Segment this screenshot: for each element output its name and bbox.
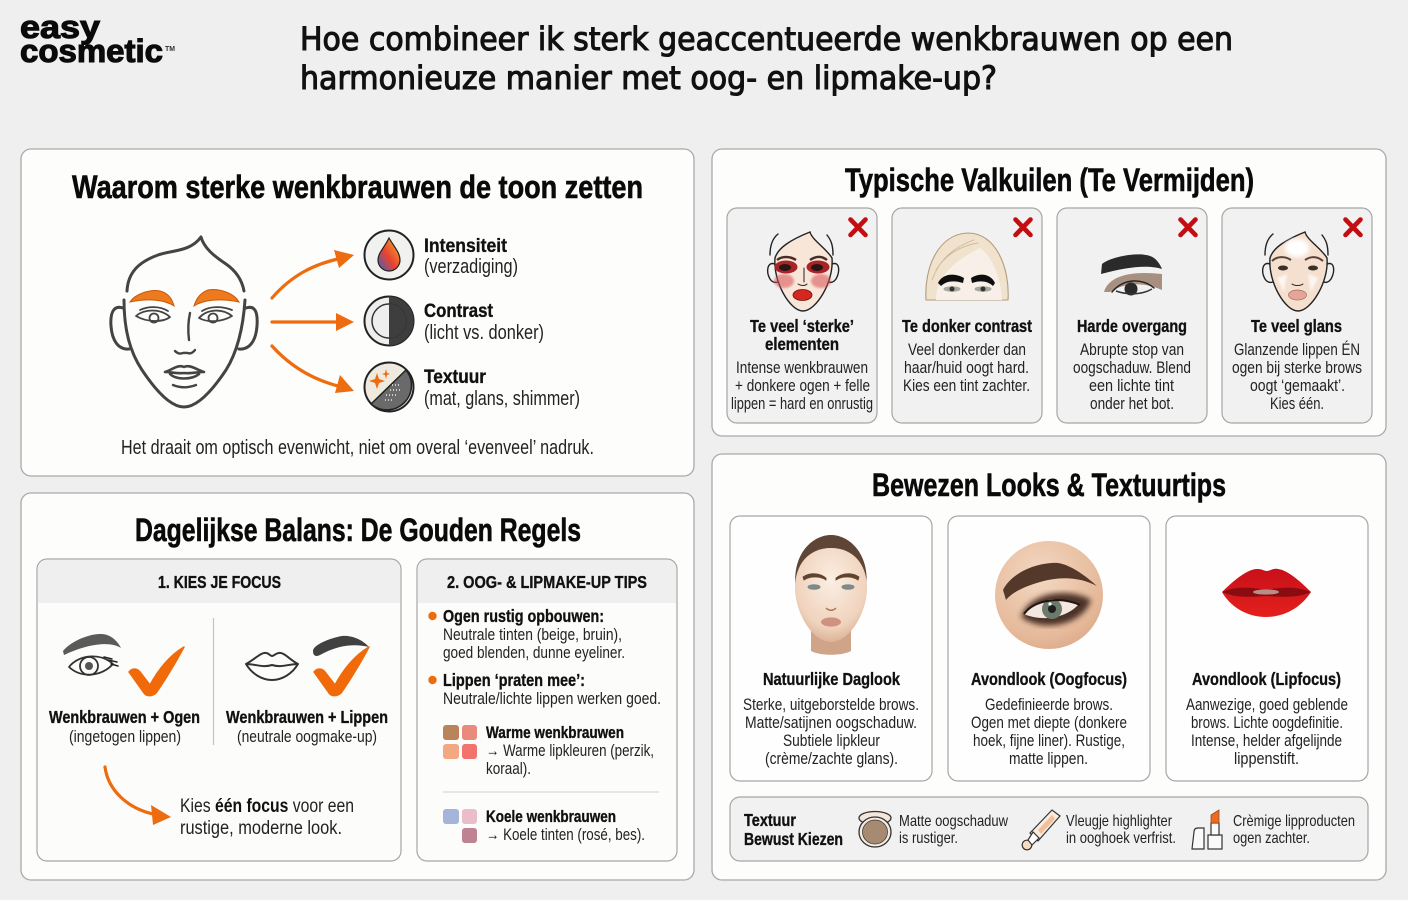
text: focus advice: Kies één focus voor een [180,796,354,817]
text: focus advice: rustige, moderne look. [180,818,342,839]
text: koele wenkbrauwen: Koele wenkbrauwen [486,808,616,826]
text: textuur: Textuur [424,366,486,388]
text: focus option 1 [49,707,200,746]
heading: textuur [744,810,843,849]
text: vleugje highlighter [1066,813,1176,847]
heading: bewezen looks: Bewezen Looks & Textuurtips [872,467,1226,503]
text: conclusion: Het draait om optisch evenwicht, niet om overal ‘evenveel’ nadruk. [121,437,594,459]
tip: ogen rustig opbouwen: Neutrale tinten (beige, bruin), [443,625,622,644]
text: natuurlijke daglook: Sterke, uitgeborstelde brows. [743,695,919,714]
text: card 1: elementen [765,334,839,354]
image: red lips [1222,569,1311,617]
panel: typische valkuilen [712,149,1386,436]
card: harde overgang [1057,208,1207,423]
icon: red x [1346,220,1360,235]
text: focus option 1: (ingetogen lippen) [69,727,181,746]
heading: valkuilen: Typische Valkuilen (Te Vermijden) [845,162,1254,198]
text: card 1: Te veel ‘sterke’ [750,316,854,336]
text: focus advice [180,796,354,839]
card: te donker contrast [892,208,1042,423]
icon: eye and brow [63,634,121,675]
panel: bewezen looks [712,454,1386,880]
icon: lipstick [1192,810,1222,849]
text: card 4: Kies één. [1270,394,1324,413]
text: koele wenkbrauwen [486,808,645,844]
text: card 3: onder het bot. [1090,394,1174,413]
logo: cosmetic [20,33,163,69]
text: card 2 [902,316,1032,395]
text: card 4: ogen bij sterke brows [1232,358,1362,377]
tip: ogen rustig opbouwen: Ogen rustig opbouwen: [443,606,604,626]
text: card 3: een lichte tint [1089,376,1174,395]
text: warme wenkbrauwen [486,724,654,778]
text: contrast: Contrast [424,300,493,322]
text: card 3: Harde overgang [1077,316,1187,336]
title: Hoe combineer ik sterk geaccentueerde wenkbrauwen op een [300,20,1233,58]
tip: ogen rustig opbouwen: goed blenden, dunne eyeliner. [443,643,625,662]
arrow: to focus advice [105,767,171,825]
sub-panel: oog- en lipmake-up tips [417,559,677,861]
text: card 1: lippen = hard en onrustig [731,394,873,413]
title [300,20,1233,97]
text: cremige lipproducten: Crèmige lipproducten [1233,813,1355,830]
header: kies je focus: 1. KIES JE FOCUS [158,572,281,592]
tip: lippen praten mee: Neutrale/lichte lippen werken goed. [443,689,661,708]
swatches: warm [443,725,477,759]
text: matte oogschaduw [899,813,1008,847]
text: textuur: (mat, glans, shimmer) [424,388,580,410]
icon: red x [1180,220,1196,235]
text: avondlook oogfocus: Avondlook (Oogfocus) [971,669,1127,689]
card: natuurlijke daglook [730,516,932,781]
text: card 4: oogt ‘gemaakt’. [1250,376,1345,395]
arrow: to contrast [272,313,354,331]
logo: TM [165,46,175,53]
text: focus option 2: Wenkbrauwen + Lippen [226,707,388,727]
card: te veel sterke elementen [727,208,877,423]
text: vleugje highlighter: in ooghoek verfrist. [1066,830,1176,847]
logo [20,9,175,69]
text: cremige lipproducten: ogen zachter. [1233,830,1310,847]
text: intensiteit: Intensiteit [424,235,507,257]
text: avondlook lipfocus: lippenstift. [1234,749,1299,768]
tip: ogen rustig opbouwen [428,606,625,662]
icon: shiny face [1263,232,1334,311]
text: card 3: Abrupte stop van [1080,340,1184,359]
image: eye close-up [995,541,1103,649]
icon: contrast circle [364,296,414,346]
icon: textuur circle [364,362,414,412]
text: natuurlijke daglook: Natuurlijke Daglook [763,669,900,689]
text: natuurlijke daglook: Subtiele lipkleur [783,731,880,750]
text: natuurlijke daglook: Matte/satijnen oogschaduw. [745,713,917,732]
icon: orange check 1 [129,647,184,696]
icon: line-art face with orange brows [111,237,257,407]
text: avondlook oogfocus: Ogen met diepte (donkere [971,713,1127,732]
text: card 2: Kies een tint zachter. [903,376,1030,395]
text: cremige lipproducten [1233,813,1355,847]
swatches: cool [443,809,477,843]
text: contrast: (licht vs. donker) [424,322,544,344]
text: card 2: haar/huid oogt hard. [904,358,1029,377]
text: focus option 1: Wenkbrauwen + Ogen [49,707,200,727]
text: avondlook oogfocus [971,669,1127,768]
text: avondlook lipfocus: Avondlook (Lipfocus) [1192,669,1341,689]
panel: dagelijkse balans [21,493,694,880]
logo: easy [20,9,100,45]
text: card 4: Te veel glans [1251,316,1342,336]
text: warme wenkbrauwen: koraal). [486,759,531,778]
card: te veel glans [1222,208,1372,423]
icon: red x [1016,220,1030,235]
icon: brow and hard eyeshadow [1101,254,1162,296]
text: card 2: Veel donkerder dan [908,340,1026,359]
text: vleugje highlighter: Vleugje highlighter [1066,813,1172,830]
icon: red x [850,220,866,235]
strip: textuur bewust kiezen [730,797,1368,861]
text: koele wenkbrauwen: → Koele tinten (rosé, bes). [486,825,645,844]
tip: lippen praten mee [428,670,661,708]
tip: lippen praten mee: Lippen ‘praten mee’: [443,670,585,690]
text: avondlook lipfocus: Aanwezige, goed geblende [1186,695,1348,714]
text: natuurlijke daglook: (crème/zachte glans). [765,749,898,768]
text: textuur [424,366,580,410]
header: tips: 2. OOG- & LIPMAKE-UP TIPS [447,572,647,592]
text: card 3: oogschaduw. Blend [1073,358,1191,377]
icon: highlighter tube [1022,810,1060,850]
text: avondlook oogfocus: matte lippen. [1009,749,1088,768]
text: intensiteit [424,235,518,278]
text: card 3 [1073,316,1191,413]
text: card 1 [731,316,873,413]
icon: lips and brow [246,636,369,680]
text: avondlook oogfocus: hoek, fijne liner). Rustige, [973,731,1125,750]
text: card 4 [1232,316,1362,413]
text: avondlook lipfocus: Intense, helder afgelijnde [1191,731,1342,750]
text: avondlook lipfocus [1186,669,1348,768]
heading: textuur: Textuur [744,810,796,830]
text: card 1: Intense wenkbrauwen [736,358,868,377]
text: intensiteit: (verzadiging) [424,256,518,278]
arrow: to textuur [272,346,354,393]
icon: orange check 2 [314,647,369,696]
text: avondlook lipfocus: brows. Lichte oogdefinitie. [1191,713,1343,732]
icon: blonde hair with dark brows [926,233,1008,300]
image: natural face [795,535,867,655]
icon: intensiteit drop [364,230,414,280]
text: natuurlijke daglook [743,669,919,768]
heading: textuur: Bewust Kiezen [744,829,843,849]
text: card 4: Glanzende lippen ÉN [1234,340,1360,359]
text: matte oogschaduw: Matte oogschaduw [899,813,1008,830]
text: avondlook oogfocus: Gedefinieerde brows. [985,695,1113,714]
text: focus option 2 [226,707,388,746]
icon: matte eyeshadow compact [859,812,891,847]
panel: waarom sterke wenkbrauwen [21,149,694,476]
text: focus option 2: (neutrale oogmake-up) [237,727,377,746]
title: harmonieuze manier met oog- en lipmake-up? [300,59,997,97]
text: matte oogschaduw: is rustiger. [899,830,958,847]
sub-panel: kies je focus [37,559,401,861]
text: card 2: Te donker contrast [902,316,1032,336]
text: warme wenkbrauwen: Warme wenkbrauwen [486,724,624,742]
text: card 1: + donkere ogen + felle [735,376,870,395]
heading: waarom: Waarom sterke wenkbrauwen de toon zetten [72,169,643,205]
arrow: to intensiteit [272,250,354,298]
card: avondlook oogfocus [948,516,1150,781]
card: avondlook lipfocus [1166,516,1368,781]
text: contrast [424,300,544,344]
heading: dagelijkse balans: Dagelijkse Balans: De Gouden Regels [135,512,581,548]
icon: overdone face [768,232,839,311]
text: warme wenkbrauwen: → Warme lipkleuren (perzik, [486,741,654,760]
